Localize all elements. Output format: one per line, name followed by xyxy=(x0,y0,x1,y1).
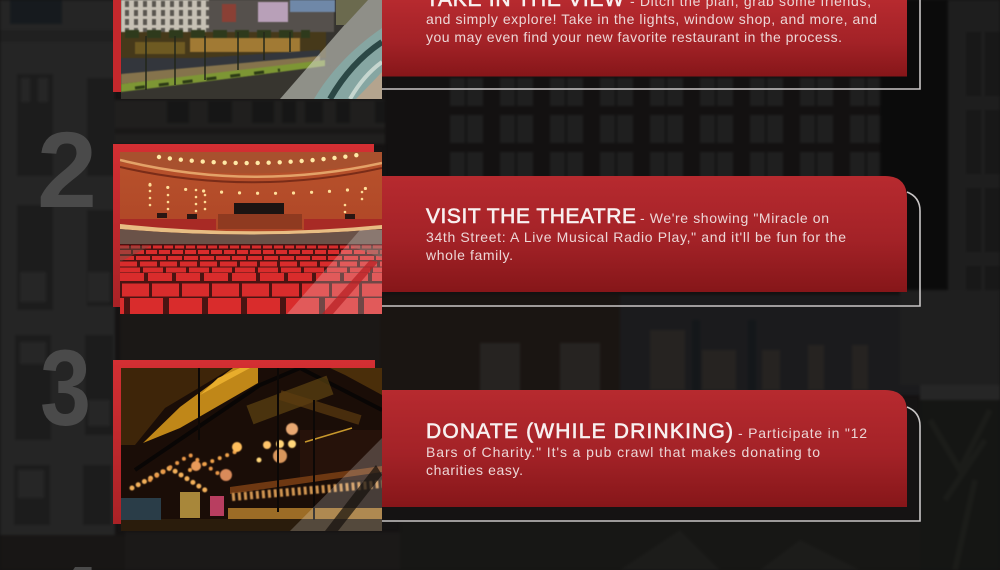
number 2: 2 xyxy=(37,109,97,230)
outline frame 2 xyxy=(380,192,920,306)
red panel 3 xyxy=(382,390,907,507)
card 2: visit the theatre xyxy=(113,144,920,314)
red panel 1 xyxy=(382,0,907,76)
text block 3: - Participate in "12 xyxy=(738,425,867,441)
card 1: take in the view xyxy=(113,0,920,99)
red photo frame 3 xyxy=(113,360,375,524)
text block 3: Bars of Charity." It's a pub crawl that makes donating to xyxy=(426,444,820,460)
text block 2: - We're showing "Miracle on xyxy=(640,210,829,226)
text block 2 xyxy=(425,205,846,263)
card 3: donate while drinking xyxy=(113,360,920,531)
text block 1: and simply explore! Take in the lights, window shop, and more, and xyxy=(426,11,877,27)
outline frame 1 xyxy=(380,0,920,89)
text block 1 xyxy=(426,0,877,45)
red photo frame 2 xyxy=(113,144,374,307)
text block 3 xyxy=(426,420,867,478)
photo: theatre auditorium xyxy=(120,152,382,314)
photo: downtown street xyxy=(121,0,382,99)
text block 3: DONATE (WHILE DRINKING) xyxy=(426,420,733,443)
text block 1: you may even find your new favorite restaurant in the process. xyxy=(426,29,842,45)
text block 2: 34th Street: A Live Musical Radio Play," and it'll be fun for the xyxy=(426,229,846,245)
text block 2: whole family. xyxy=(425,247,513,263)
outline frame 3 xyxy=(380,407,920,521)
text block 3: charities easy. xyxy=(426,462,523,478)
red photo frame 1 xyxy=(113,0,121,92)
number 3: 3 xyxy=(40,327,91,448)
photo: bar with hanging bulbs xyxy=(121,368,382,531)
red panel 2 xyxy=(382,176,907,292)
text block 2: VISIT THE THEATRE xyxy=(426,205,636,228)
